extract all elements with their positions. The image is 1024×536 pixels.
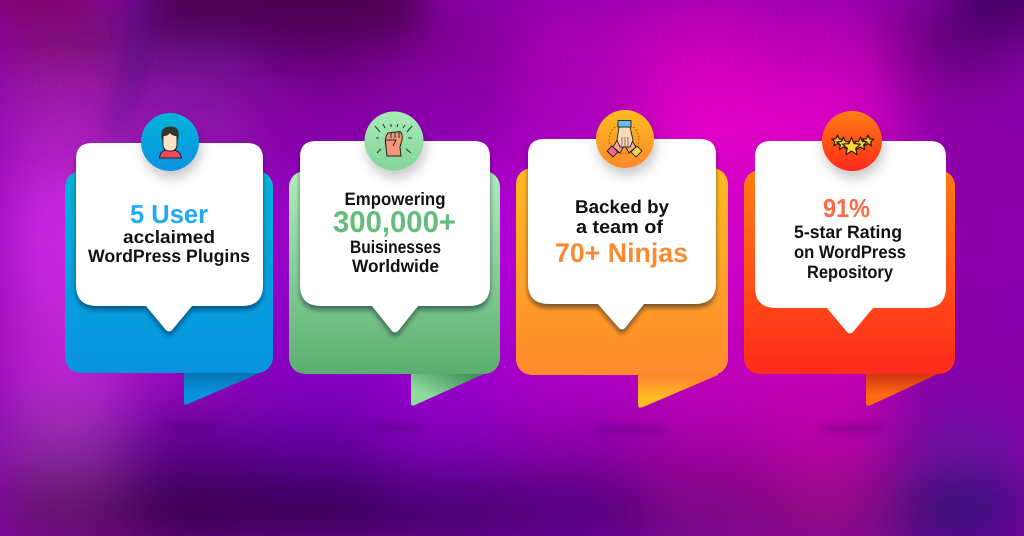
text: Empowering bbox=[344, 189, 446, 209]
speech bubble bbox=[755, 141, 946, 334]
speech bubble bbox=[528, 139, 716, 330]
panel: rating bbox=[744, 111, 955, 406]
text bbox=[333, 189, 456, 276]
text: 5-star Rating bbox=[794, 222, 902, 242]
icon: team hands bbox=[596, 110, 654, 168]
text bbox=[794, 193, 906, 282]
speech bubble bbox=[76, 143, 263, 332]
text bbox=[555, 196, 688, 268]
text: 300,000+ bbox=[333, 206, 456, 239]
panel: user plugins bbox=[65, 113, 273, 405]
icon: raised fist bbox=[364, 112, 424, 170]
text: 91% bbox=[823, 193, 870, 223]
text: Worldwide bbox=[352, 256, 439, 276]
text: Backed by bbox=[575, 196, 670, 217]
icon: person bbox=[141, 113, 199, 171]
panel back and tail bbox=[516, 168, 728, 408]
panel back and tail bbox=[65, 171, 273, 405]
panel: businesses bbox=[289, 112, 500, 406]
speech bubble bbox=[300, 141, 490, 332]
icon: stars bbox=[822, 111, 882, 171]
floor shadows bbox=[160, 423, 886, 433]
panel back and tail bbox=[744, 170, 955, 406]
panel back and tail bbox=[289, 171, 500, 406]
text: 70+ Ninjas bbox=[555, 238, 688, 268]
text: acclaimed bbox=[123, 227, 215, 247]
text: 5 User bbox=[130, 199, 208, 229]
text: a team of bbox=[576, 216, 664, 237]
text: WordPress Plugins bbox=[88, 246, 250, 266]
text: Buisinesses bbox=[350, 237, 441, 257]
text bbox=[88, 199, 250, 266]
panel: ninjas bbox=[516, 110, 728, 408]
text: Repository bbox=[807, 262, 893, 282]
text: on WordPress bbox=[794, 242, 906, 262]
